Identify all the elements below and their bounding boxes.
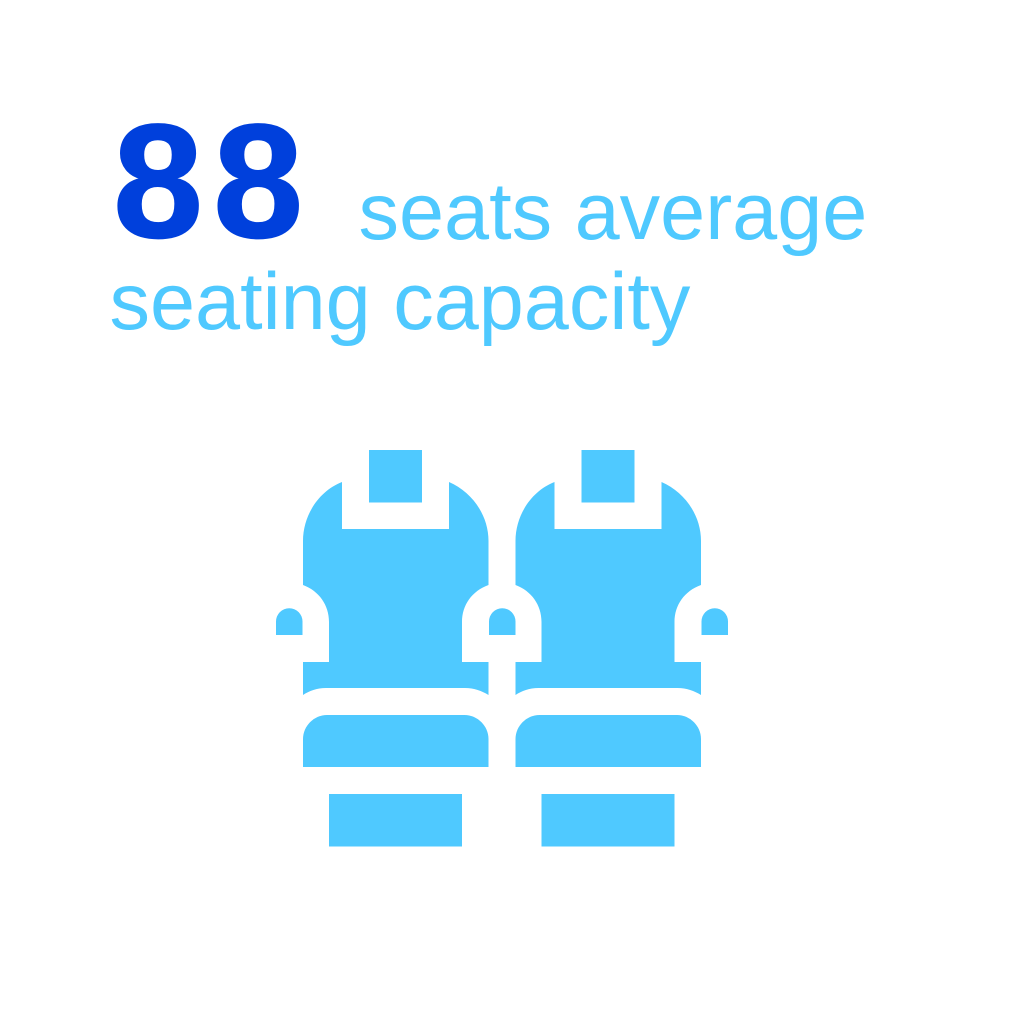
caption line 1: seats average — [358, 167, 867, 257]
headline number: 88 — [113, 91, 313, 272]
icon: pair of seats — [276, 450, 728, 846]
icon: right seat — [516, 450, 728, 846]
caption line 2: seating capacity — [110, 257, 691, 347]
icon: left seat — [276, 450, 516, 846]
